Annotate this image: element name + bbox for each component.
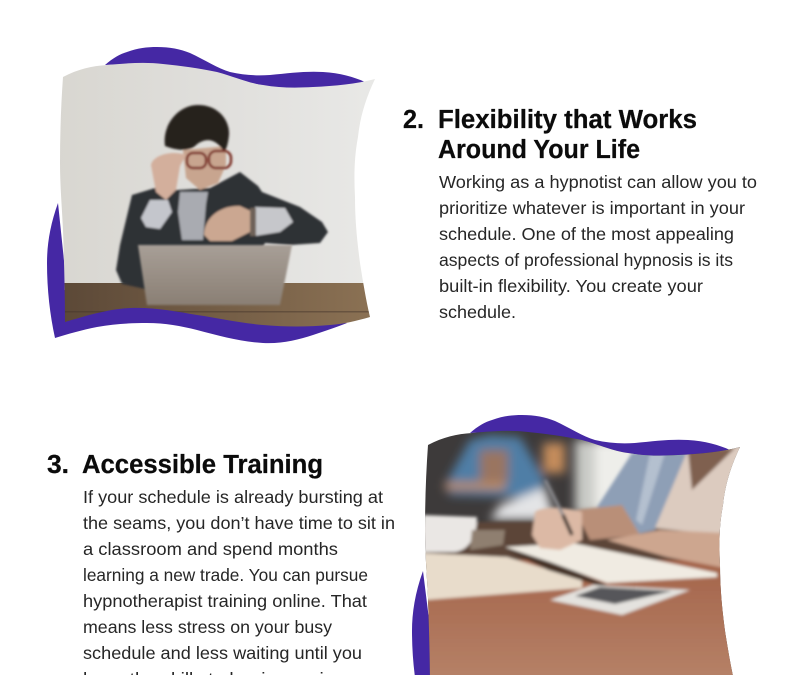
purple wave frame [412,415,730,675]
purple wave frame bottom [47,203,347,343]
heading: flexibility: Around Your Life [438,136,640,164]
text block: accessible training: schedule and less waiting until you [83,643,362,663]
heading: flexibility [403,106,697,164]
text block: flexibility: schedule. [439,302,516,322]
text block: flexibility: aspects of professional hypnosis is its [439,250,733,270]
text block: flexibility: built-in flexibility. You create your [439,276,703,296]
panel: training photo [412,415,750,675]
heading: accessible training: 3. [47,451,69,479]
purple wave frame top [105,47,365,90]
text block: flexibility: schedule. One of the most appealing [439,224,734,244]
photo: man checking watch at laptop [60,62,375,326]
text block: flexibility: Working as a hypnotist can allow you to [439,172,757,192]
heading: flexibility: 2. [403,106,424,134]
panel: flexibility photo [47,47,385,343]
text block: accessible training: hypnotherapist training online. That [83,591,367,611]
text block: accessible training: the seams, you don’t have time to sit in [83,513,395,533]
text block: accessible training: learning a new trade. You can pursue [83,565,368,585]
heading: flexibility: Flexibility that Works [438,106,697,134]
text block: accessible training: If your schedule is already bursting at [83,487,383,507]
photo: person writing in notebook [415,425,750,675]
text block: accessible training: a classroom and spend months [83,539,338,559]
text block: flexibility: prioritize whatever is important in your [439,198,745,218]
text block: flexibility [439,172,757,322]
heading: accessible training: Accessible Training [82,451,323,479]
text block: accessible training [83,487,395,675]
text block: accessible training: means less stress on your busy [83,617,332,637]
